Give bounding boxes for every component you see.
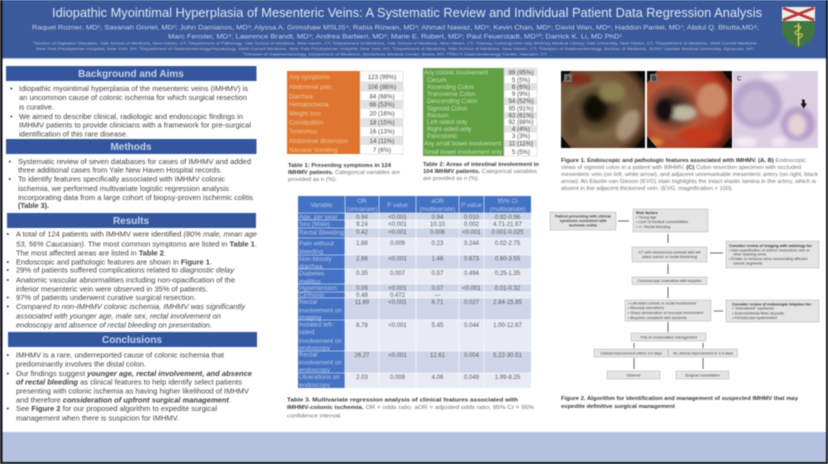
table 3 header: Variable xyxy=(310,202,333,209)
box: colonoscopic evaluation xyxy=(632,277,707,284)
table 3 values: 0.02-2.75 xyxy=(495,241,521,247)
table 2: areas of intestinal involvement: 63 (61%) xyxy=(508,112,534,120)
table 3 values: 0.94 xyxy=(356,215,368,221)
footer band xyxy=(2,432,826,462)
authors: Marc Fenster, MD⁹; Lawrence Brandt, MD⁹; Andrea Barbieri, MD²; Marie E. Robert, MD²; Paul Feuerstadt, MD¹⁰; Darrick K. Li, MD PhD¹ xyxy=(168,34,622,40)
table 2: areas of intestinal involvement: 9 (9%) xyxy=(512,91,530,98)
header band xyxy=(2,0,826,59)
heading: background and aims: Background and Aims xyxy=(78,69,184,80)
text block: conclusions bullets: • xyxy=(6,350,10,360)
text block: results bullets: The most affected areas are listed in Table 2. xyxy=(16,248,166,258)
table 3 values: 1.99-8.25 xyxy=(495,375,521,381)
text block: methods bullets: To identify features specifically associated with IMHMV colonic xyxy=(18,174,225,184)
figure 1 caption: absent in the adjacent thickened vein. (EVG, magnification × 100). xyxy=(561,186,733,192)
table 3 values: <0.001 xyxy=(388,323,407,329)
box: colonoscopic evaluation: Colonoscopic evaluation with biopsies xyxy=(638,279,702,283)
box: ct: sided colonic or rectal thickening xyxy=(642,255,697,259)
table 3 variable labels: Isolated left- xyxy=(299,322,334,328)
table 3 values: <0.001 xyxy=(462,230,481,236)
table 3 header: 95% CI xyxy=(497,198,518,205)
panel: background and aims xyxy=(6,66,256,138)
text block: background bullets: an uncommon cause of colonic ischemia for which surgical resection xyxy=(19,93,247,102)
box: biopsy review: • Subendothelial fibrin deposits xyxy=(732,312,784,316)
box: endoscopic findings xyxy=(625,300,711,321)
table 3 values: 0.002 xyxy=(464,222,480,228)
table 1: presenting symptoms xyxy=(287,71,403,154)
box: patient presenting: syndrome consistent with xyxy=(560,219,607,223)
box: imaging review: colonic segments xyxy=(733,262,762,266)
text block: conclusions bullets xyxy=(6,350,252,422)
table 3 row bands xyxy=(298,196,531,388)
authors: Raquel Rozner, MD¹; Savanah Gisriel, MD²; John Damianos, MD³; Alyssa A. Grimshaw MSLIS⁴; Rabia Rizwan, MD³; Ahmad Nawaz, MD⁵; Kevin Chan, MD⁵; David Wan, MD⁵; Haddon Pantel, MD⁷; Abdul Q. Bhutta,MD⁸; xyxy=(32,24,759,32)
box: clinical improvement xyxy=(594,349,668,357)
table 3 values: <0.001 xyxy=(462,286,481,292)
table 3 variable labels: involvement on xyxy=(299,338,342,345)
table 3 values: 0.23 xyxy=(432,241,444,247)
box: biopsy review: Consider review of endoscopic biopsies for: xyxy=(732,302,812,306)
table 3 variable labels: endoscopy xyxy=(299,345,331,352)
figure 2 caption: Figure 2. Algorithm for identification and management of suspected IMHMV that may xyxy=(561,396,799,402)
table 1: presenting symptoms: Abdominal distension xyxy=(289,138,348,145)
table 1 caption: provided as n (%). xyxy=(288,177,338,183)
text block: results bullets: 97% of patients underwent curative surgical resection. xyxy=(16,293,196,302)
table 1: presenting symptoms: 123 (99%) xyxy=(368,74,396,81)
table 3 caption: IMHMV-colonic ischemia. OR = odds ratio; aOR = adjusted odds ratio; 95% CI = 95% xyxy=(287,405,534,411)
box: biopsy review: • Perivascular hyalinization xyxy=(732,316,777,320)
box: imaging review: other draining veins xyxy=(733,252,766,256)
box: risk factors: Risk factors xyxy=(636,211,658,215)
table 2 caption: 104 IMHMV patients. Categorical variables xyxy=(423,169,537,175)
box: clinical improvement: Clinical improvement within 3-5 days xyxy=(600,352,662,356)
table 3 header: (multivariate) xyxy=(420,206,455,213)
text block: results bullets: associated with younger age, male sex, rectal involvement on xyxy=(16,312,221,320)
table 1 caption: Table 1: Presenting symptoms in 124 xyxy=(288,163,392,169)
figure 2 caption: expedite definitive surgical management xyxy=(561,404,675,410)
arrow xyxy=(667,322,669,332)
text block: results bullets: • xyxy=(6,258,10,266)
table 1: presenting symptoms: 66 (53%) xyxy=(369,102,395,109)
box: risk factors: • +/- Rectal bleeding xyxy=(636,225,670,229)
box: observe xyxy=(607,371,660,379)
table 2: areas of intestinal involvement: Left-sided only xyxy=(427,119,468,126)
table 2: areas of intestinal involvement: 99 (95%) xyxy=(508,70,534,76)
table 3 values: 0.48 xyxy=(356,293,368,299)
text block: background bullets: • xyxy=(10,112,13,121)
table 3 values: 4.06 xyxy=(432,375,444,381)
text block: results bullets: 53, 56% Caucasian). The most common symptoms are listed in Table 1. xyxy=(16,240,257,248)
box: biopsy review: • "Arterialized" capillaries xyxy=(732,306,774,310)
table 3 variable labels: Pain without xyxy=(299,240,334,248)
heading: results: Results xyxy=(113,216,149,227)
table 3 values: 0.01-0.32 xyxy=(495,286,521,292)
table 2: areas of intestinal involvement: Right-sided only xyxy=(427,126,472,133)
table 3 variable labels: Rectal xyxy=(299,352,317,358)
text block: results bullets: inferior mesenteric vein were observed in 35% of patients. xyxy=(16,284,208,294)
table 3 header: (multivariate) xyxy=(490,206,525,213)
table 2: areas of intestinal involvement: Sigmoid Colon xyxy=(427,106,468,112)
arrow xyxy=(667,287,669,298)
table 3 variable labels: Cirrhosis xyxy=(299,292,324,299)
table 3 values: 0.673 xyxy=(464,256,480,262)
table 3 values: 1.86 xyxy=(356,241,368,247)
table 1: presenting symptoms: Any symptoms xyxy=(289,74,330,81)
table 3 values: 2.84-15.85 xyxy=(493,300,523,306)
table 2: areas of intestinal involvement xyxy=(423,68,537,156)
box: biopsy review xyxy=(726,300,819,322)
box: imaging review: • Non-opacification of inferior mesenteric vein or xyxy=(729,248,810,252)
table 3 values: <0.001 xyxy=(388,353,407,359)
table 1: presenting symptoms: 16 (13%) xyxy=(369,129,395,136)
affiliations: New York-Presbyterian Hospital, New York, NY; ⁶Department of Gastroenterology/Hepatology, Weill Cornell Medicine, New York-Presbyterian Hospital, New York, NY; ⁷Department of Medicine, Yale School of Medicine, New Haven, CT; ⁸Division of Gastroenterology, Section of Medicine, SUNY Upstate Medical University, Syracuse, NY; xyxy=(36,47,754,51)
table 2: areas of intestinal involvement: 95 (91%) xyxy=(508,106,534,112)
table 2: areas of intestinal involvement: Ascending Colon xyxy=(427,84,474,91)
box: ct xyxy=(632,247,707,262)
heading: conclusions xyxy=(8,332,257,347)
figure 1 caption xyxy=(561,158,818,192)
box: imaging review xyxy=(726,241,819,268)
table 3 values: 0.94 xyxy=(432,215,444,221)
table 2: areas of intestinal involvement: 3 (3%) xyxy=(512,133,530,140)
text block: methods bullets: • xyxy=(8,157,12,166)
text block: conclusions bullets: See Figure 2 for our proposed algorithm to expedite surgical xyxy=(16,404,217,413)
table 1: presenting symptoms: 14 (11%) xyxy=(370,138,394,145)
table 3 values: 0.92-0.96 xyxy=(495,215,521,221)
table 3 variable labels: bleeding xyxy=(299,248,324,256)
box: imaging review: Consider review of imaging with radiology for: xyxy=(729,244,813,248)
table 1: presenting symptoms: Diarrhea xyxy=(289,93,313,100)
table 3 variable labels: endoscopy xyxy=(299,382,331,389)
table 3 values: 10.10 xyxy=(430,222,446,228)
text block: results bullets: A total of 124 patients with IMHMV were identified (80% male, mean age xyxy=(16,230,257,238)
table 3 variable labels: Sex (Male) xyxy=(299,221,330,228)
heading: background and aims xyxy=(6,66,256,81)
table 3 values: 6.71 xyxy=(432,300,444,306)
table 3 values: 0.007 xyxy=(390,271,406,277)
box: ct: CT with intravenous contrast with left xyxy=(639,250,701,254)
image A: endoscopy xyxy=(561,71,645,148)
box: surgical consultation xyxy=(676,371,729,379)
table 3 values xyxy=(354,215,524,381)
text block: results bullets: Compared to non-IMHMV colonic ischemia, IMHMV was significantly xyxy=(16,302,246,311)
table 1: presenting symptoms: 106 (86%) xyxy=(368,84,396,91)
text block: results bullets: • xyxy=(6,266,10,274)
table 2: areas of intestinal involvement: Any colonic involvement xyxy=(424,70,488,76)
image C: histology: C xyxy=(737,76,742,82)
table 3 variable labels: Age, per year xyxy=(299,214,338,221)
box: patient presenting: Patient presenting with clinical xyxy=(555,214,611,218)
table 3 variable labels: Non-bloody xyxy=(299,256,332,263)
table 3 values: 2.66 xyxy=(356,256,368,262)
table 1: presenting symptoms: Constipation xyxy=(289,120,324,127)
text block: methods bullets: three additional cases from Yale New Haven Hospital records. xyxy=(18,166,222,174)
table 3 values: <0.001 xyxy=(388,286,407,292)
table 3 values: 4.71-21.67 xyxy=(493,222,523,228)
table 3 variable labels: Hypertension xyxy=(299,285,337,292)
table 3 values: 0.494 xyxy=(464,271,480,277)
figure 1: endoscopic and pathologic images xyxy=(561,71,818,148)
table 3 values: 0.472 xyxy=(390,293,406,299)
box: risk factors: • Lack of medical comorbidities xyxy=(636,220,688,224)
table 3 values: <0.001 xyxy=(388,222,407,228)
arrow xyxy=(667,264,669,274)
table 3 values: 0.35 xyxy=(356,271,368,277)
table 3 variable labels: diarrhea xyxy=(299,264,323,270)
table 3 values: 12.61 xyxy=(430,353,446,359)
arrows: outcomes xyxy=(634,358,703,369)
image B: endoscopy: B xyxy=(652,76,657,82)
table 3 values: 0.027 xyxy=(464,300,480,306)
table 3 values: <0.001 xyxy=(388,215,407,221)
text block: conclusions bullets: management when there is suspicion for IMHMV. xyxy=(16,414,179,422)
table 1: presenting symptoms: Nausea/ Vomiting xyxy=(289,147,338,154)
table 3 caption xyxy=(287,398,534,420)
text block: conclusions bullets: presenting with colonic ischemia as having higher likelihood of IMHMV xyxy=(16,386,249,396)
table 3 caption: confidence interval. xyxy=(287,414,343,420)
arrows: branches xyxy=(634,343,703,348)
table 3 values: 0.25-1.35 xyxy=(495,271,521,277)
text block: conclusions bullets: of rectal bleeding as clinical features to help identify select patients xyxy=(16,378,242,386)
text block: background bullets: IMHMV patients to provide clinicians with a framework for pre-surgical xyxy=(19,120,251,130)
table 3 variable labels: Rectal Bleeding xyxy=(299,230,344,236)
box: risk factors: • Young age xyxy=(636,216,656,220)
table 3 variable labels: sided xyxy=(299,329,315,336)
table 1: presenting symptoms: 84 (68%) xyxy=(369,93,395,100)
panel: results xyxy=(6,213,257,330)
table 3 values: 5.45 xyxy=(432,323,444,329)
table 3 values: 1.46 xyxy=(432,256,444,262)
text block: conclusions bullets: and therefore consideration of upfront surgical management . xyxy=(16,396,231,404)
affiliations: ¹Section of Digestive Diseases, Yale School of Medicine, New Haven, CT; ²Department of Pathology, Yale School of Medicine, New Haven, CT; ³Department of Medicine, Yale School of Medicine, New Haven, CT; ⁴Harvey Cushing/John Hay Whitney Medical Library, Yale University, New Haven, CT; ⁵Department of Medicine, Weill Cornell Medicine, xyxy=(33,42,758,46)
table 3 values: 2.03 xyxy=(356,375,368,381)
table 2: areas of intestinal involvement: 54 (52%) xyxy=(508,98,534,105)
table 3 variable labels xyxy=(299,214,344,389)
table 3 values: 0.004 xyxy=(464,353,480,359)
table 3 values: 0.006 xyxy=(430,230,446,236)
heading: results xyxy=(7,213,256,228)
box: trial of conservative management: Trial of conservative management xyxy=(640,336,698,340)
text block: results bullets: • xyxy=(6,302,10,311)
table 1 caption: IMHMV patients. Categorical variables are xyxy=(288,170,400,176)
box: surgical consultation: Surgical consultation xyxy=(685,374,720,378)
text block: methods bullets: Systematic review of seven databases for cases of IMHMV and added xyxy=(18,157,251,166)
table 1 caption xyxy=(288,163,400,183)
arrow xyxy=(710,252,723,254)
text block: methods bullets: • xyxy=(8,174,12,184)
table 2 caption xyxy=(423,162,540,182)
text block: results bullets: Anatomic vascular abnormalities including non-opacification of the xyxy=(16,276,235,284)
table 3 header: OR xyxy=(357,198,367,205)
affiliations: ⁹Division of Gastroenterology, Department of Medicine, Montefiore Medical Center, Bronx, NY; ¹⁰PACT-Gastroenterology Center, Hamden, CT xyxy=(243,52,548,56)
text block: background bullets xyxy=(10,84,251,138)
box: observe: Observe xyxy=(626,374,641,378)
table 3 values: <0.001 xyxy=(388,256,407,262)
title: Idiopathic Myointimal Hyperplasia of Mesenteric Veins: A Systematic Review and Individual Patient Data Regression Analysis xyxy=(52,6,762,20)
table 3 header: aOR xyxy=(431,198,444,205)
table 2: areas of intestinal involvement: Cecum xyxy=(427,77,447,84)
table 2 caption: Table 2: Areas of intestinal involvement in xyxy=(423,162,540,168)
text block: background bullets: is curative. xyxy=(19,102,54,112)
table 2: areas of intestinal involvement: 6 (6%) xyxy=(512,84,530,91)
text block: conclusions bullets: Our findings suggest younger age, rectal involvement, and absence xyxy=(16,369,252,378)
box: imaging review: • Ectatic or tortuous veins surrounding affected xyxy=(729,257,808,261)
text block: methods bullets: ischemia, we performed multivariate logistic regression analysis xyxy=(18,184,229,193)
heading: methods xyxy=(6,139,256,154)
panel: methods xyxy=(6,139,256,210)
text block: methods bullets xyxy=(8,157,253,210)
text block: conclusions bullets: • xyxy=(6,369,10,378)
text block: background bullets: • xyxy=(10,84,13,93)
box: patient presenting xyxy=(550,212,616,230)
arrow xyxy=(714,310,723,312)
table 3 variable labels: involvement on xyxy=(299,360,342,366)
table 1: presenting symptoms: Abdominal pain xyxy=(289,84,332,91)
table 1: presenting symptoms: 20 (16%) xyxy=(369,111,395,118)
table 3 variable labels: Diabetes xyxy=(299,270,324,278)
table 3 values: 9.24 xyxy=(356,222,368,228)
table 3 values: 8.78 xyxy=(356,323,368,329)
table 3 header xyxy=(310,198,525,213)
table 2: areas of intestinal involvement: Small bowel involvement only xyxy=(424,149,503,156)
table 1: presenting symptoms: 7 (6%) xyxy=(373,147,391,154)
table 3 variable labels: involvement on xyxy=(299,308,342,314)
arrow xyxy=(618,220,629,222)
table 3 values: 0.049 xyxy=(464,375,480,381)
text block: results bullets: • xyxy=(6,276,10,284)
figure 2 caption xyxy=(561,396,799,410)
authors xyxy=(32,24,759,40)
table 2: areas of intestinal involvement: 92 (88%) xyxy=(508,119,534,126)
table 2: areas of intestinal involvement: 4 (4%) xyxy=(512,126,530,133)
table 3 header: (univariate) xyxy=(347,206,377,213)
table 2: areas of intestinal involvement: Descending Colon xyxy=(427,98,478,105)
table 3 values: <0.001 xyxy=(388,230,407,236)
figure 1 caption: Figure 1. Endoscopic and pathologic features associated with IMHMV. (A, B) Endoscopic xyxy=(561,158,806,164)
table 2: areas of intestinal involvement: Rectum xyxy=(427,112,448,120)
figure 2: management algorithm flowchart xyxy=(550,209,819,379)
table 3 variable labels: Rectal xyxy=(299,299,317,306)
table 3 values: 0.09 xyxy=(356,286,368,292)
table 3 values: 0.60-3.55 xyxy=(495,256,521,262)
figure 1 caption: mesenteric vein (on left, white arrow), and adjacent unremarkable mesenteric artery (on right, black xyxy=(561,172,818,178)
text block: results bullets: endoscopy and absence of rectal bleeding on presentation. xyxy=(16,320,212,330)
text block: results bullets: • xyxy=(6,230,10,238)
table 1: presenting symptoms: Weight loss xyxy=(289,111,321,118)
figure 1 caption: views of sigmoid colon in a patient with IMHMV. (C) Colon resection specimen with occluded xyxy=(561,165,801,171)
table 3 values: 11.69 xyxy=(355,300,370,306)
table 1: presenting symptoms: Tenesmus xyxy=(289,129,317,136)
box: trial of conservative management xyxy=(631,333,706,341)
table 1: presenting symptoms: Hematochezia xyxy=(289,102,329,109)
figure 1 caption: arrow). An Elastin van Gieson (EVG) stain highlights the intact elastic lamina in the artery, which is xyxy=(561,179,816,185)
table 2: areas of intestinal involvement: Pancolonic xyxy=(427,133,457,140)
table 3 values: 1.00-12.67 xyxy=(493,323,523,329)
heading: conclusions: Conclusions xyxy=(102,335,162,346)
box: risk factors xyxy=(633,209,708,232)
arrow xyxy=(667,234,669,243)
text block: conclusions bullets: • xyxy=(6,404,10,413)
table 3 header: P value xyxy=(387,202,408,209)
table 3 values: 0.009 xyxy=(390,241,406,247)
text block: background bullets: Idiopathic myointimal hyperplasia of the mesenteric veins (IMHMV) is xyxy=(19,84,248,93)
box: no clinical improvement: No clinical improvement in 3-5 days xyxy=(673,352,733,356)
table 3 values: 0.42 xyxy=(356,230,368,236)
table 3 values: 0.244 xyxy=(464,241,480,247)
box: endoscopic findings: • Left-sided colonic or rectal involvement xyxy=(628,302,697,306)
table 3 variable labels: Ulcerations on xyxy=(299,374,340,381)
table 3 variable labels: mellitus xyxy=(299,278,321,286)
table 2: areas of intestinal involvement: 5 (5%) xyxy=(512,77,530,84)
icon: crest shield xyxy=(782,7,815,48)
table 3 variable labels: imaging xyxy=(299,314,322,322)
table 2: areas of intestinal involvement: Transverse Colon xyxy=(427,91,476,98)
table 3 values: 0.009 xyxy=(390,375,406,381)
text block: background bullets: identification of this rare disease. xyxy=(19,130,128,138)
image C: histology xyxy=(732,71,818,148)
table 2: areas of intestinal involvement: 5 (5%) xyxy=(512,149,530,156)
box: no clinical improvement xyxy=(668,349,738,357)
text block: background bullets: We aimed to describe clinical, radiologic and endoscopic findings in xyxy=(19,112,243,121)
text block: results bullets: • xyxy=(6,293,10,302)
table 3 values: 5.22-30.51 xyxy=(493,353,523,359)
box: patient presenting: ischemic colitis xyxy=(569,224,597,228)
image B: endoscopy xyxy=(647,71,732,148)
table 2 caption: are provided as n (%). xyxy=(423,176,479,182)
table 3 values: 0.57 xyxy=(432,271,444,277)
box: endoscopic findings: • Biopsies consistent with ischemia xyxy=(628,316,688,320)
table 2: areas of intestinal involvement: Any small bowel involvement xyxy=(424,140,501,148)
box: endoscopic findings: • Sharp demarcation of mucosal involvement xyxy=(628,311,704,315)
table 3: multivariate regression xyxy=(298,196,531,389)
table 3 values: 0.001-0.025 xyxy=(491,230,524,236)
image A: endoscopy: A xyxy=(566,76,571,82)
table 3 variable labels: endoscopy xyxy=(299,367,331,374)
table 3 values: 0.010 xyxy=(464,215,480,221)
text block: results bullets: 29% of patients suffered complications related to diagnostic delay xyxy=(16,266,235,274)
affiliations xyxy=(33,42,758,56)
table 2: areas of intestinal involvement: 11 (11%) xyxy=(509,140,533,148)
heading: methods: Methods xyxy=(110,142,152,153)
panel: conclusions xyxy=(6,332,257,422)
table 1: presenting symptoms: 18 (15%) xyxy=(369,120,395,127)
text block: conclusions bullets: predominantly involves the distal colon. xyxy=(16,360,146,368)
table 3 values: 0.044 xyxy=(464,323,480,329)
table 3 caption: Table 3. Multivariate regression analysis of clinical features associated with xyxy=(287,398,519,404)
text block: methods bullets: (Table 3). xyxy=(18,201,49,210)
text block: results bullets xyxy=(6,230,257,330)
text block: conclusions bullets: IMHMV is a rare, underreported cause of colonic ischemia that xyxy=(16,350,224,360)
box: endoscopic findings: • Mucosal ulcerations xyxy=(628,306,664,310)
table 3 values: <0.001 xyxy=(388,300,407,306)
text block: results bullets: Endoscopic and pathologic features are shown in Figure 1. xyxy=(16,258,212,266)
table 3 values: 0.07 xyxy=(432,286,444,292)
table 3 header: P value xyxy=(461,202,482,209)
table 3 values: 26.27 xyxy=(354,353,370,359)
table 3 values: — xyxy=(434,293,440,299)
text block: methods bullets: incorporating data from a large cohort of biopsy-proven ischemic colitis xyxy=(18,193,253,202)
